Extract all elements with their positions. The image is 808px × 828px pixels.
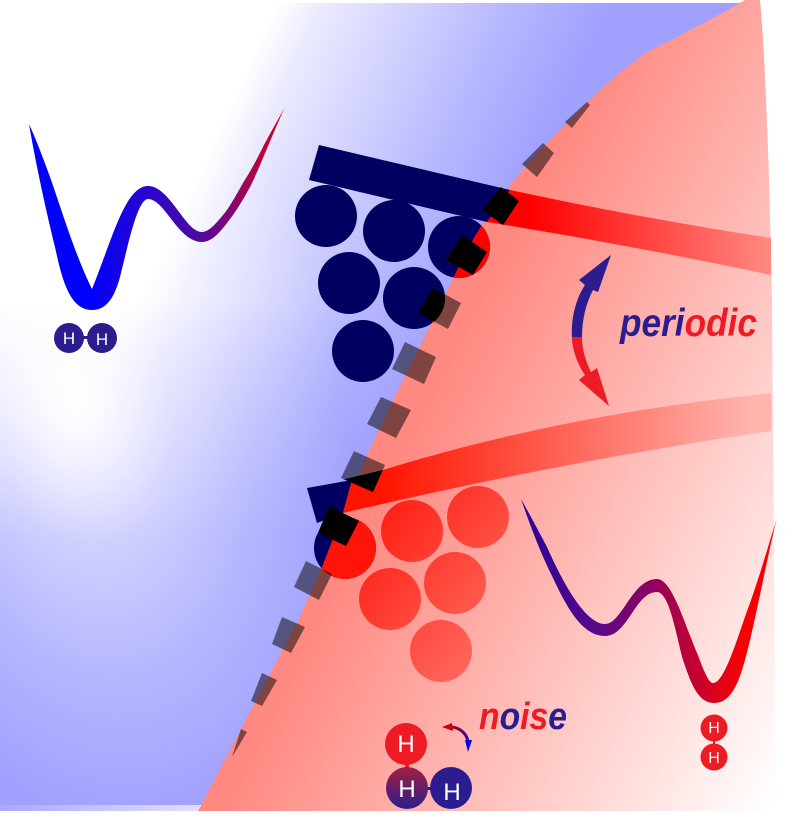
dashed interface line — [232, 102, 590, 757]
arrow: periodic double-headed arrow — [572, 255, 611, 406]
icon: blue H2 molecule: H — [96, 330, 108, 349]
icon: H3 transition molecule: H — [443, 779, 461, 806]
right potential well curve — [521, 499, 777, 703]
lower cantilever bar — [307, 393, 771, 523]
upper atom cluster, blue side — [295, 185, 490, 382]
lower atom cluster, red side — [314, 486, 509, 682]
panel: red gradient region — [198, 0, 776, 811]
label: periodic: periodic — [619, 302, 757, 345]
arrow: noise rotation — [442, 723, 472, 752]
icon: red H2 molecule: H — [708, 750, 720, 767]
icon: blue H2 molecule — [54, 323, 117, 353]
icon: red H2 molecule — [700, 714, 728, 770]
icon: H3 transition molecule: H — [398, 776, 416, 803]
icon: H3 transition molecule: H — [397, 731, 415, 758]
icon: blue H2 molecule: H — [63, 329, 75, 348]
label: noise: noise — [479, 696, 567, 738]
icon: red H2 molecule: H — [708, 720, 720, 737]
upper cantilever bar — [309, 145, 771, 275]
left potential well curve — [29, 107, 285, 310]
icon: H3 transition molecule — [385, 723, 472, 809]
